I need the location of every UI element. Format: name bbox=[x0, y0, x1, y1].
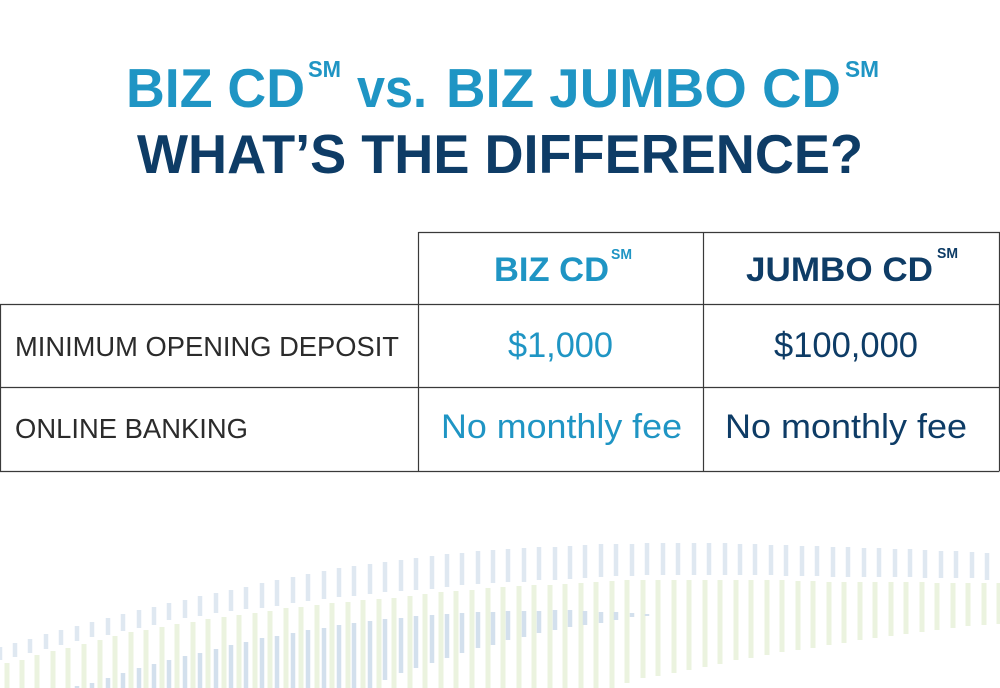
value: Jumbo CD online banking: No monthly fee bbox=[725, 408, 967, 446]
wave: green bars bbox=[7, 580, 999, 688]
title bbox=[126, 56, 879, 185]
value: Biz CD minimum deposit: $1,000 bbox=[508, 326, 613, 365]
value: Jumbo CD minimum deposit: $100,000 bbox=[774, 326, 918, 365]
row label: online banking: ONLINE BANKING bbox=[15, 413, 248, 444]
title line 1: BIZ JUMBO CD bbox=[446, 57, 841, 119]
comparison table bbox=[0, 232, 1000, 472]
column header: Jumbo CD: SM bbox=[937, 246, 958, 262]
column header: Jumbo CD: JUMBO CD bbox=[746, 251, 933, 289]
title line 1: SM bbox=[308, 56, 341, 82]
title line 1: SM bbox=[845, 56, 879, 82]
wave: upper blue bars bbox=[0, 543, 987, 660]
title line 2: WHAT’S THE DIFFERENCE? bbox=[137, 123, 863, 185]
row label: minimum opening deposit: MINIMUM OPENING DEPOSIT bbox=[15, 331, 399, 362]
column header: Biz CD: SM bbox=[611, 247, 632, 263]
table grid bbox=[0, 232, 1000, 472]
value: Biz CD online banking: No monthly fee bbox=[441, 408, 682, 446]
title line 1: BIZ CD bbox=[126, 57, 305, 119]
wave: lower blue bars bbox=[77, 610, 647, 688]
column header: Biz CD: BIZ CD bbox=[494, 251, 609, 289]
decorative wave of vertical bars bbox=[0, 543, 999, 688]
title line 1: vs. bbox=[357, 57, 427, 119]
title line 1 bbox=[126, 56, 879, 119]
